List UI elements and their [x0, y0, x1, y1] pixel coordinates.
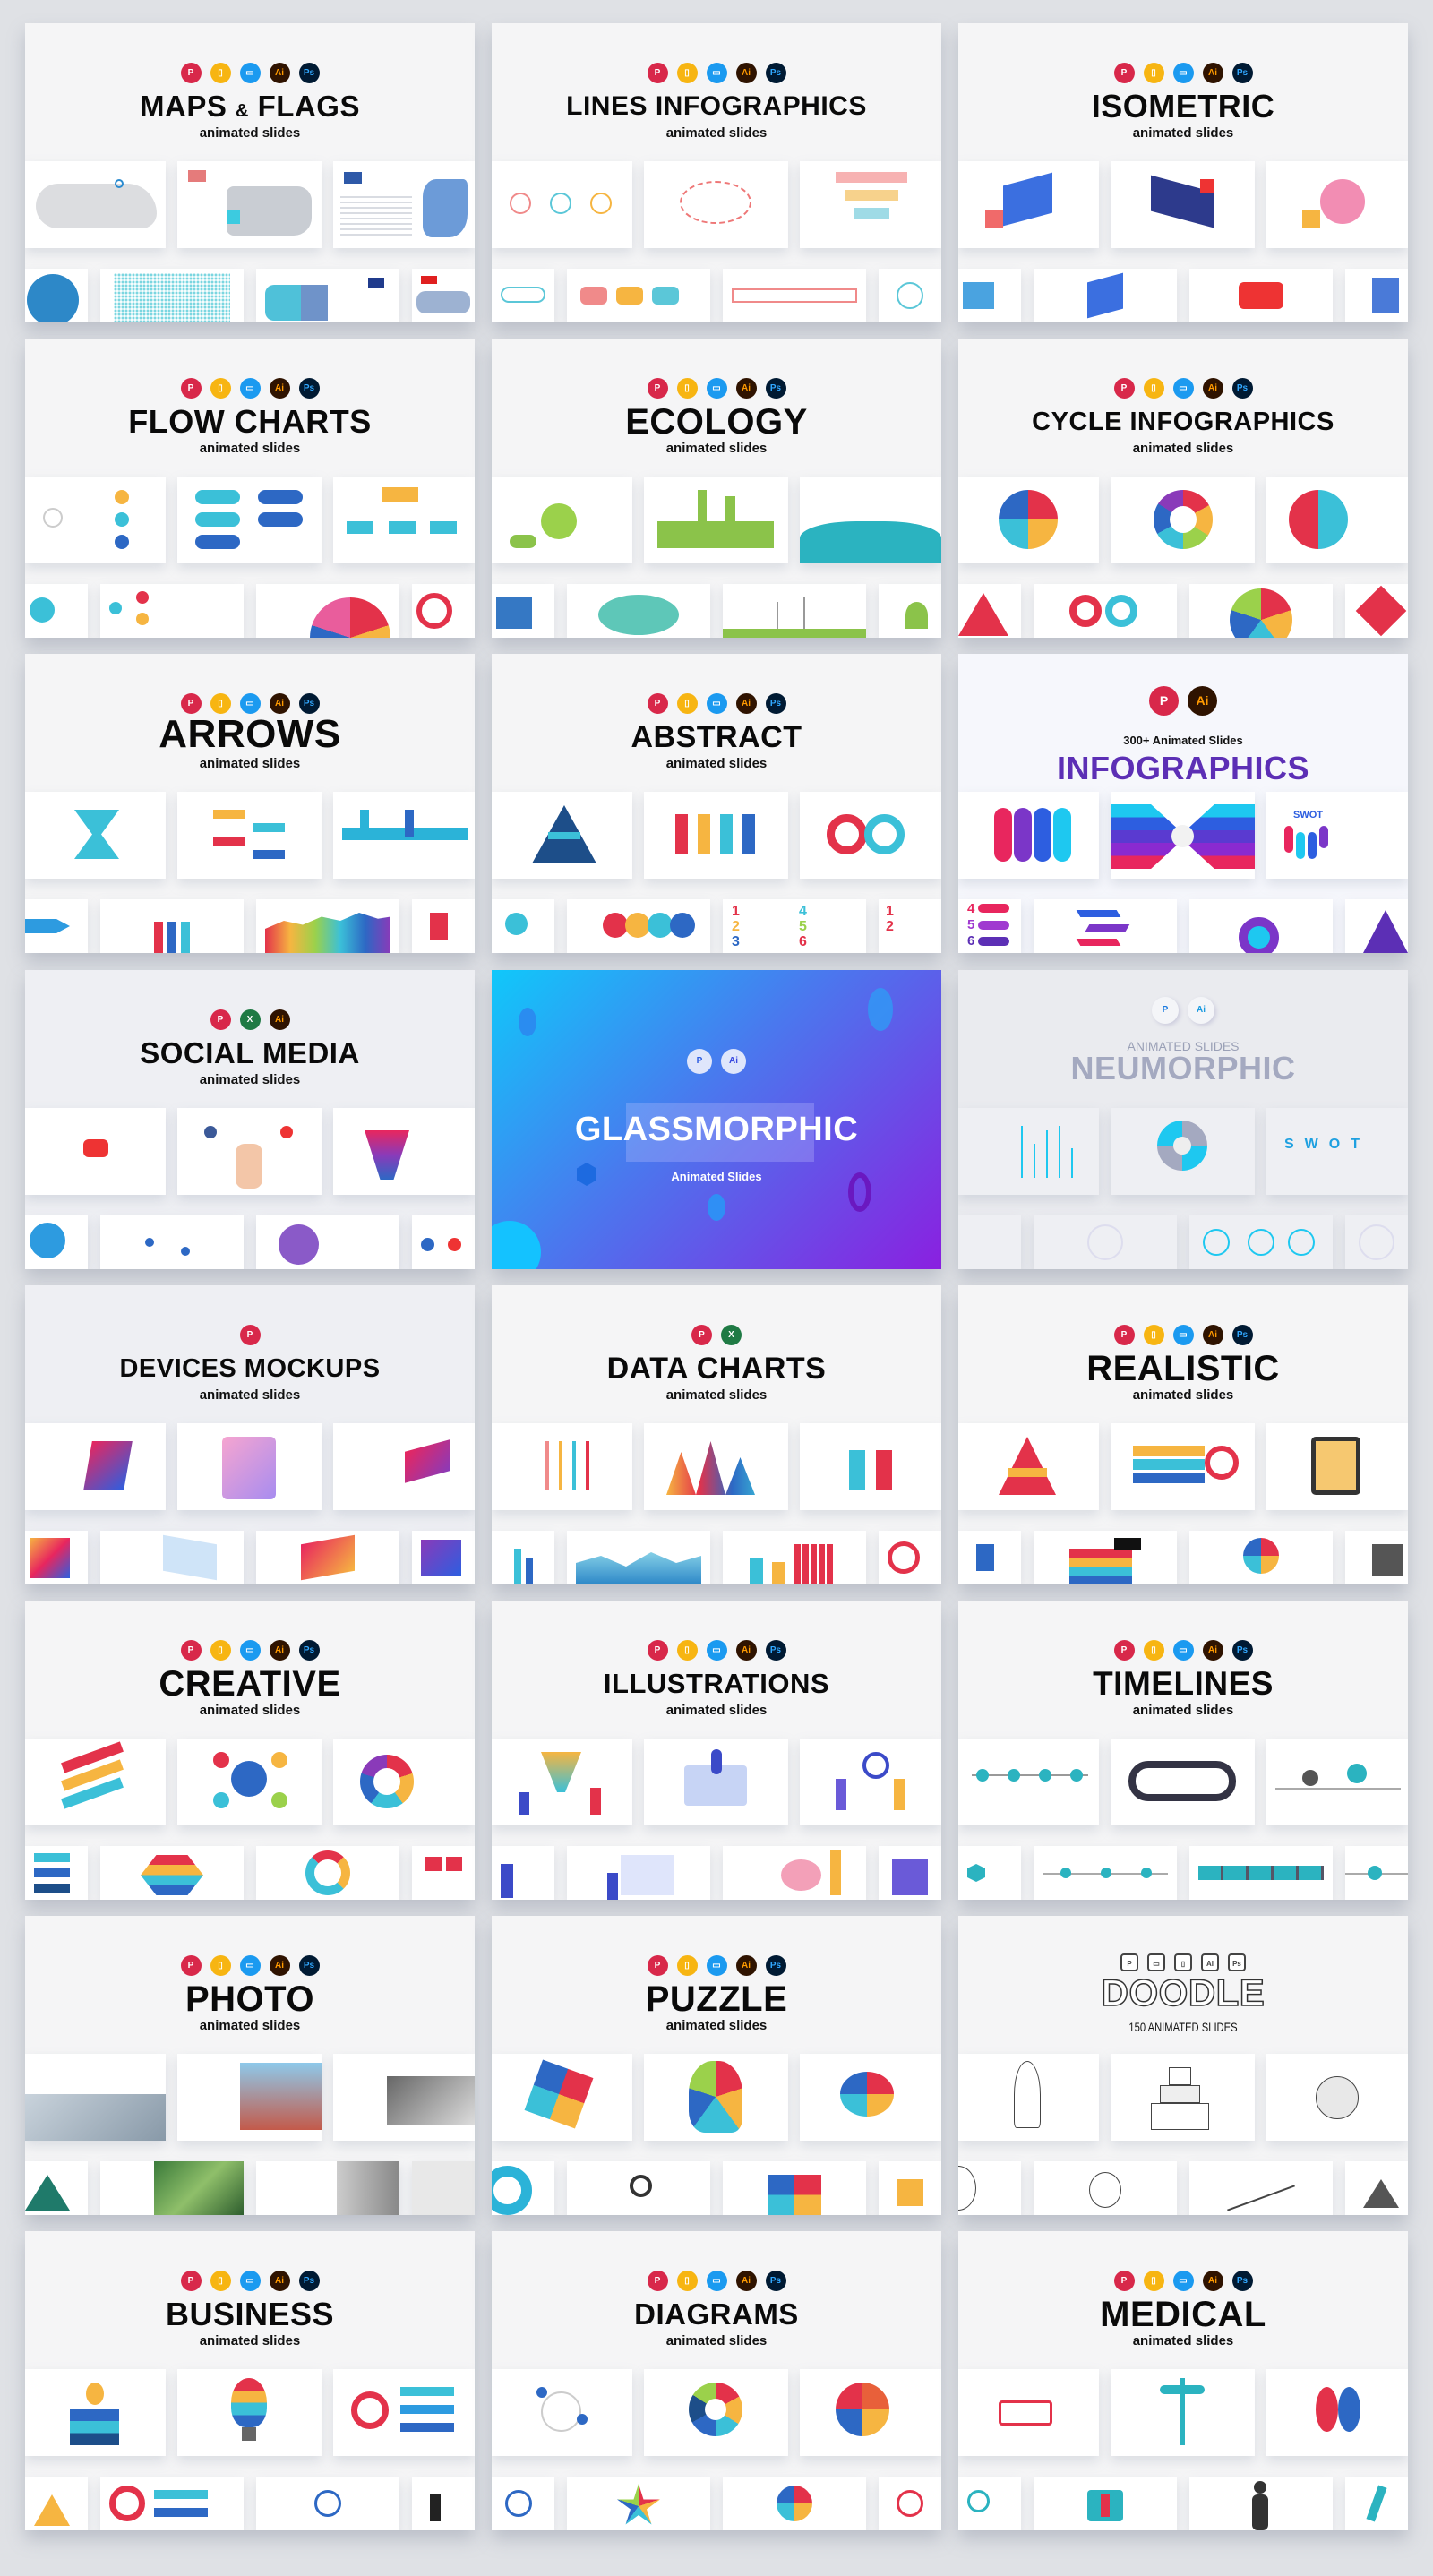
header: Ps	[304, 1645, 314, 1655]
tile: abstract: 5	[799, 919, 807, 934]
header: animated slides	[1133, 2333, 1233, 2348]
thumbnails	[958, 2054, 1408, 2215]
header	[625, 378, 808, 456]
header	[1093, 1640, 1274, 1718]
tile: ecology	[492, 339, 941, 638]
header: ▭	[245, 2276, 254, 2286]
header	[646, 1955, 787, 2033]
header: ▭	[712, 383, 721, 393]
tile: infographics: 5	[967, 917, 974, 932]
header: ▯	[218, 1645, 223, 1655]
icons: Ai	[729, 1056, 738, 1066]
header: Ai	[1208, 68, 1217, 78]
header: animated slides	[200, 125, 300, 141]
tile: abstract: 1	[732, 904, 740, 919]
header: ▭	[1179, 1330, 1188, 1340]
thumbnails	[25, 1423, 475, 1584]
header: MEDICAL	[1100, 2295, 1266, 2334]
header: animated slides	[200, 756, 300, 771]
header	[1070, 997, 1295, 1086]
header: NEUMORPHIC	[1070, 1050, 1295, 1086]
header: animated slides	[200, 2333, 300, 2348]
header: P	[655, 1645, 660, 1655]
header: P	[218, 1015, 223, 1025]
tile: lines infographics	[492, 23, 941, 322]
tile: abstract: 3	[732, 934, 740, 949]
header: ▯	[684, 68, 690, 78]
header: ▭	[712, 2276, 721, 2286]
header: animated slides	[666, 756, 767, 771]
header: ▯	[1151, 2276, 1156, 2286]
subtitle: Animated Slides	[671, 1170, 762, 1183]
header: DOODLE	[1102, 1971, 1265, 2014]
tile: abstract	[492, 654, 941, 953]
tile: neumorphic: SWOT	[1284, 1137, 1370, 1152]
header: ▯	[684, 383, 690, 393]
glass panel	[626, 1103, 814, 1162]
header: DATA CHARTS	[607, 1352, 826, 1386]
tile: business	[25, 2231, 475, 2530]
header: PHOTO	[185, 1979, 314, 2019]
header	[631, 693, 802, 771]
header	[181, 1955, 320, 2033]
header: animated slides	[200, 1703, 300, 1718]
header: P	[699, 1330, 705, 1340]
tile: social media	[25, 970, 475, 1269]
header: animated slides	[200, 441, 300, 456]
thumbnails	[25, 2369, 475, 2530]
header: ▯	[684, 699, 690, 708]
header: ▯	[1181, 1960, 1185, 1968]
header: ▯	[684, 1961, 690, 1971]
tile: flow charts	[25, 339, 475, 638]
header: animated slides	[666, 125, 767, 141]
header: Ai	[1208, 1645, 1217, 1655]
header	[128, 378, 372, 456]
thumbnails	[492, 2369, 941, 2530]
header: P	[1121, 2276, 1127, 2286]
header: Ps	[770, 68, 781, 78]
header: Ai	[742, 68, 751, 78]
header: ECOLOGY	[625, 402, 808, 442]
header: animated slides	[666, 1387, 767, 1403]
header: Ai	[742, 1645, 751, 1655]
header: Ps	[304, 2276, 314, 2286]
header	[166, 2271, 334, 2348]
header: P	[1160, 693, 1168, 708]
icons	[687, 1049, 746, 1074]
header: Ps	[770, 2276, 781, 2286]
header: animated slides	[1133, 441, 1233, 456]
header: animated slides	[200, 2018, 300, 2033]
header: X	[247, 1015, 253, 1025]
header: DIAGRAMS	[634, 2297, 799, 2331]
icons: P	[697, 1056, 702, 1066]
tile: medical	[958, 2231, 1408, 2530]
header: ARROWS	[159, 712, 341, 756]
header: animated slides	[666, 2018, 767, 2033]
header: ▭	[712, 1645, 721, 1655]
thumbnails	[25, 161, 475, 322]
header: CREATIVE	[159, 1664, 341, 1704]
header: CYCLE INFOGRAPHICS	[1032, 408, 1334, 436]
header: INFOGRAPHICS	[1057, 750, 1309, 786]
header: Ps	[304, 68, 314, 78]
header	[1057, 686, 1309, 786]
header: P	[247, 1330, 253, 1340]
tile: doodle	[958, 1916, 1408, 2215]
header: animated slides	[200, 1387, 300, 1403]
tile: photo	[25, 1916, 475, 2215]
header: P	[1121, 1645, 1127, 1655]
header: P	[188, 1961, 193, 1971]
tile: glassmorphic	[492, 970, 941, 1269]
tile: abstract: 2	[732, 919, 740, 934]
tile: infographics: SWOT	[1293, 810, 1323, 820]
header: BUSINESS	[166, 2296, 334, 2332]
thumbnails	[25, 2054, 475, 2215]
thumbnails	[492, 1739, 941, 1900]
header	[566, 63, 867, 141]
header: ISOMETRIC	[1092, 88, 1274, 125]
header: P	[1121, 1330, 1127, 1340]
header: Ai	[1208, 1330, 1217, 1340]
header: X	[728, 1330, 734, 1340]
header: LINES INFOGRAPHICS	[566, 91, 867, 121]
header: Ai	[275, 1961, 284, 1971]
header: ▯	[218, 699, 223, 708]
header: P	[188, 699, 193, 708]
header: Ps	[770, 1645, 781, 1655]
header: ▯	[684, 1645, 690, 1655]
header	[1086, 1325, 1280, 1403]
header: P	[655, 68, 660, 78]
tile: realistic	[958, 1285, 1408, 1584]
tile: infographics: 4	[967, 901, 974, 916]
decorative spheres	[86, 988, 1384, 2527]
header: ▯	[1151, 68, 1156, 78]
header	[1032, 378, 1334, 456]
header: P	[655, 1961, 660, 1971]
header: P	[655, 383, 660, 393]
tile: abstract: 4	[799, 904, 807, 919]
header: P	[1163, 1005, 1168, 1015]
header: ▯	[1151, 1330, 1156, 1340]
thumbnails	[492, 2054, 941, 2215]
header	[1092, 63, 1274, 141]
header: ILLUSTRATIONS	[604, 1668, 829, 1699]
header	[159, 693, 341, 771]
tile: infographics	[958, 654, 1408, 953]
header: ▭	[1179, 1645, 1188, 1655]
header: P	[1121, 383, 1127, 393]
header: ▯	[218, 1961, 223, 1971]
header: ▭	[1153, 1960, 1160, 1968]
header: Ps	[1232, 1960, 1241, 1968]
thumbnails	[492, 1423, 941, 1584]
header: Ai	[1197, 1005, 1206, 1015]
header: ▭	[712, 1961, 721, 1971]
header	[604, 1640, 829, 1718]
tile: cycle infographics	[958, 339, 1408, 638]
header: 150 ANIMATED SLIDES	[1128, 2020, 1238, 2034]
header: P	[1127, 1960, 1132, 1968]
thumbnails	[958, 1739, 1408, 1900]
header: PUZZLE	[646, 1979, 787, 2019]
tile: puzzle	[492, 1916, 941, 2215]
header: animated slides	[666, 2333, 767, 2348]
tile: diagrams	[492, 2231, 941, 2530]
tile: timelines	[958, 1601, 1408, 1900]
header: ▭	[1179, 68, 1188, 78]
tile: maps & flags	[25, 23, 475, 322]
header: P	[188, 1645, 193, 1655]
header: animated slides	[1133, 125, 1233, 141]
thumbnails	[958, 1423, 1408, 1584]
header: ▭	[245, 383, 254, 393]
tile: devices mockups	[25, 1285, 475, 1584]
header: Ps	[1237, 1645, 1248, 1655]
header: ▯	[1151, 383, 1156, 393]
header: ▭	[1179, 383, 1188, 393]
header: ▭	[245, 699, 254, 708]
header: Ai	[1208, 2276, 1217, 2286]
header: Ai	[1197, 693, 1209, 708]
header: animated slides	[1133, 1703, 1233, 1718]
tile: abstract: 2	[886, 919, 894, 934]
thumbnails	[492, 161, 941, 322]
header	[119, 1325, 381, 1403]
tile: neumorphic	[958, 970, 1408, 1269]
tile: abstract: 1	[886, 904, 894, 919]
header: ▯	[1151, 1645, 1156, 1655]
tile: abstract: 6	[799, 934, 807, 949]
thumbnails	[958, 477, 1408, 638]
thumbnails	[492, 792, 941, 953]
header: MAPS & FLAGS	[140, 90, 360, 123]
thumbnails	[25, 1739, 475, 1900]
header: Ps	[1237, 2276, 1248, 2286]
header: ▭	[1179, 2276, 1188, 2286]
header: Ps	[770, 383, 781, 393]
thumbnails	[958, 1114, 1408, 1269]
header: Ps	[304, 383, 314, 393]
tile: arrows	[25, 654, 475, 953]
header: ▯	[684, 2276, 690, 2286]
thumbnails	[25, 1108, 475, 1269]
tile: creative	[25, 1601, 475, 1900]
header: Ps	[304, 1961, 314, 1971]
header: ▯	[218, 2276, 223, 2286]
header: P	[188, 68, 193, 78]
header: ▯	[218, 68, 223, 78]
header: ▭	[712, 699, 721, 708]
header: Ai	[742, 1961, 751, 1971]
header: Ps	[304, 699, 314, 708]
thumbnails	[25, 477, 475, 638]
header: 300+ Animated Slides	[1123, 734, 1243, 747]
header: Ai	[275, 1645, 284, 1655]
thumbnails	[958, 2369, 1408, 2530]
header: FLOW CHARTS	[128, 403, 372, 440]
header: DEVICES MOCKUPS	[119, 1354, 381, 1383]
header: Ps	[1237, 1330, 1248, 1340]
header: Ai	[742, 2276, 751, 2286]
header: Ai	[742, 383, 751, 393]
header: Ps	[770, 1961, 781, 1971]
header	[159, 1640, 341, 1718]
tile: infographics: 6	[967, 933, 974, 949]
header: ▭	[245, 68, 254, 78]
header: ▭	[245, 1645, 254, 1655]
header: ▭	[712, 68, 721, 78]
header: Ai	[275, 383, 284, 393]
header: Ai	[275, 1015, 284, 1025]
header	[607, 1325, 826, 1403]
header: P	[188, 2276, 193, 2286]
header: ▯	[218, 383, 223, 393]
header: SOCIAL MEDIA	[140, 1036, 360, 1069]
header: Ai	[275, 2276, 284, 2286]
header: ▭	[245, 1961, 254, 1971]
header	[140, 63, 360, 141]
header: P	[655, 2276, 660, 2286]
header	[634, 2271, 799, 2348]
thumbnails	[958, 161, 1408, 322]
header: P	[655, 699, 660, 708]
header	[1102, 1953, 1265, 2034]
header	[1100, 2271, 1266, 2348]
header: ABSTRACT	[631, 720, 802, 754]
header: Ai	[275, 68, 284, 78]
header: Ai	[742, 699, 751, 708]
thumbnails	[958, 792, 1408, 953]
header: Ps	[1237, 68, 1248, 78]
header: ANIMATED SLIDES	[1127, 1039, 1240, 1053]
header: TIMELINES	[1093, 1665, 1274, 1702]
header: Ai	[275, 699, 284, 708]
tile: data charts	[492, 1285, 941, 1584]
header: REALISTIC	[1086, 1349, 1280, 1388]
header: Ps	[1237, 383, 1248, 393]
header: animated slides	[200, 1072, 300, 1087]
header: P	[188, 383, 193, 393]
title: GLASSMORPHIC	[575, 1111, 858, 1148]
header: Ps	[770, 699, 781, 708]
thumbnails	[25, 792, 475, 953]
header: animated slides	[666, 441, 767, 456]
header: animated slides	[666, 1703, 767, 1718]
tile: illustrations	[492, 1601, 941, 1900]
tile: isometric	[958, 23, 1408, 322]
thumbnails	[492, 477, 941, 638]
header: animated slides	[1133, 1387, 1233, 1403]
header	[140, 1009, 360, 1087]
header: Ai	[1208, 383, 1217, 393]
header: P	[1121, 68, 1127, 78]
header: AI	[1206, 1960, 1214, 1968]
